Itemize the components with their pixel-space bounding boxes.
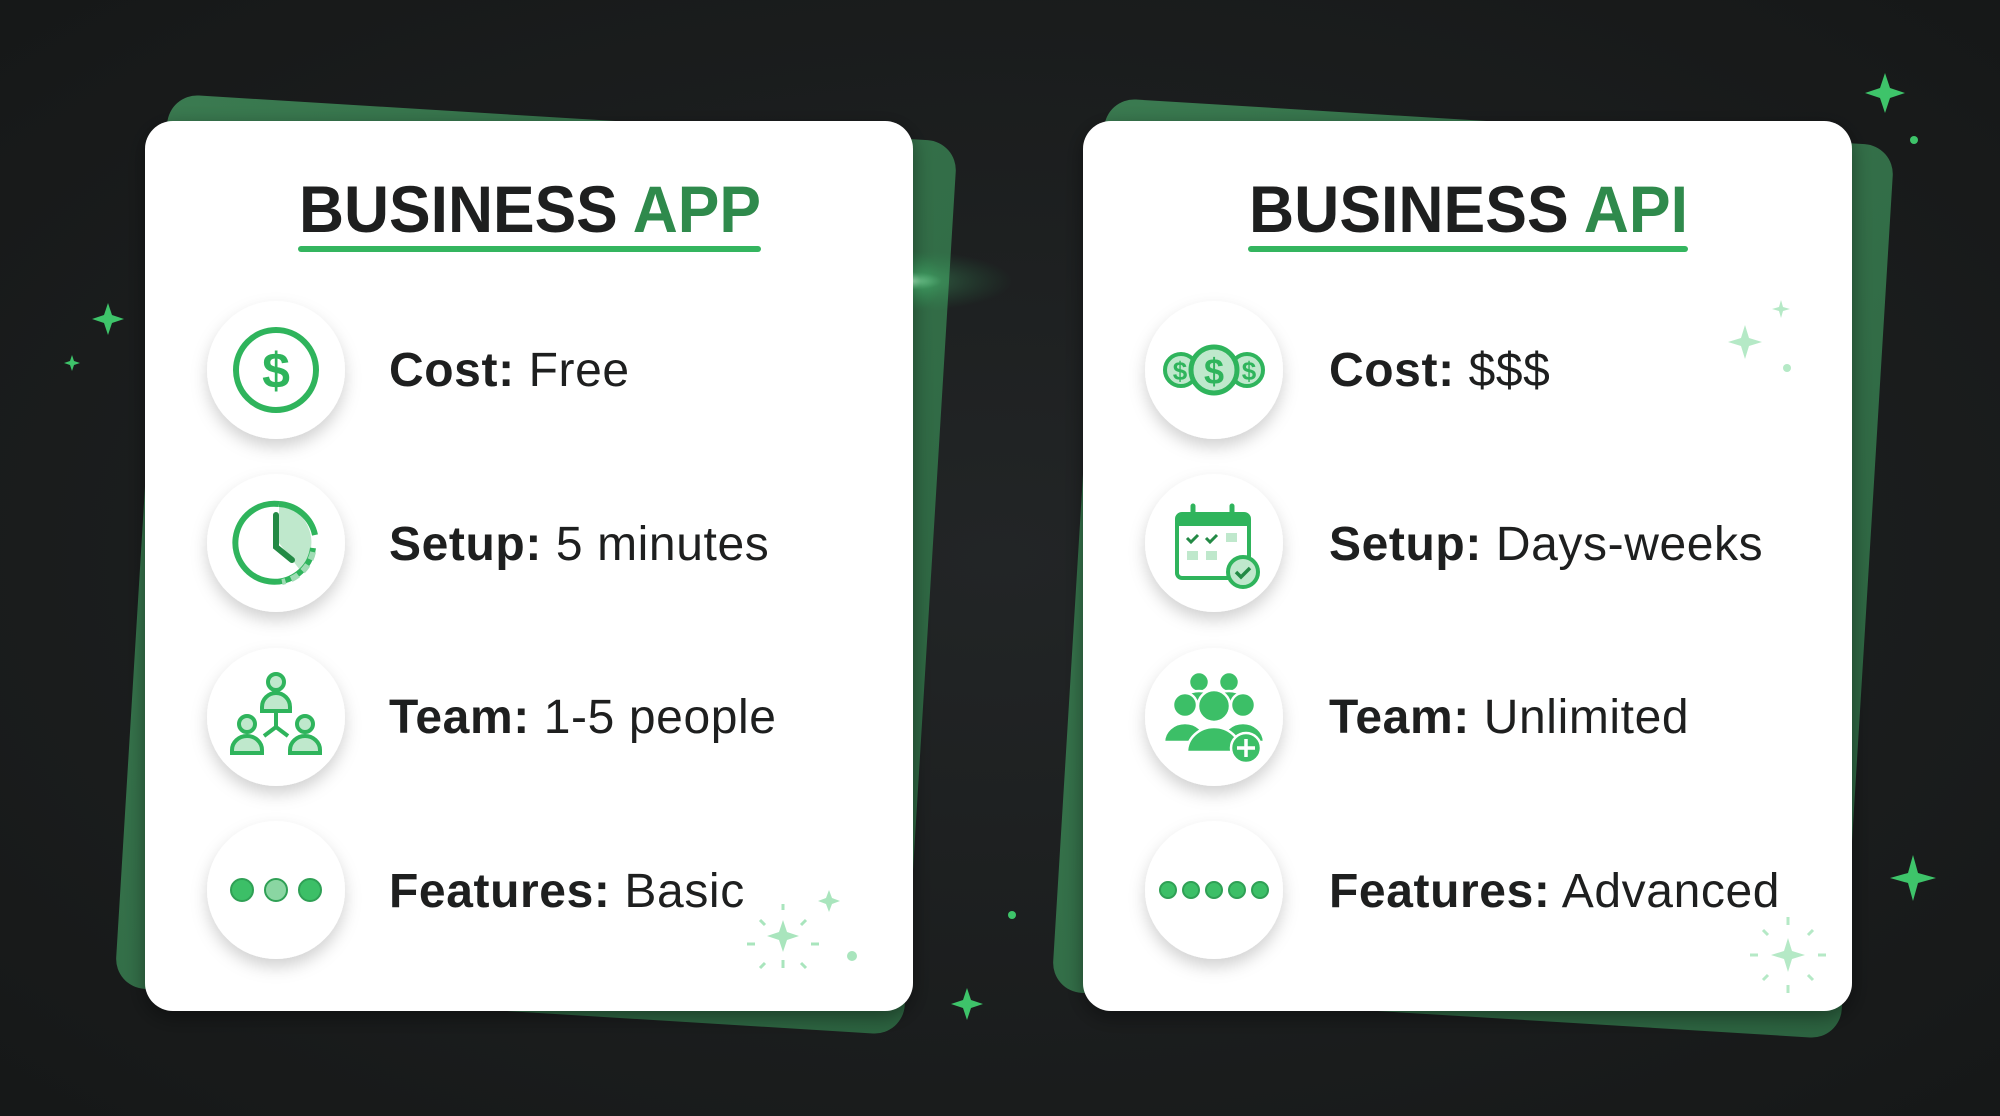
icon: coins xyxy=(1165,347,1263,393)
icon: calendar check xyxy=(1177,506,1258,587)
card: business api xyxy=(1083,121,1852,1011)
row: features basic xyxy=(207,821,745,959)
row: team unlimited xyxy=(1145,648,1689,786)
row: setup days-weeks xyxy=(1145,474,1763,612)
icon: coins: $ xyxy=(1204,351,1224,392)
row: features basic: Features: Basic xyxy=(389,865,745,918)
row: features advanced: Features: Advanced xyxy=(1329,865,1780,918)
icon: team hierarchy xyxy=(232,674,320,753)
sparkles in card xyxy=(747,890,857,968)
icon: five dots xyxy=(1160,882,1268,898)
icon: clock xyxy=(235,504,315,582)
row: cost free: Cost: Free xyxy=(389,344,630,397)
icon: three dots xyxy=(231,879,321,901)
glow sparkle near left card xyxy=(812,251,1012,311)
background sparkles xyxy=(64,73,1936,1020)
row: team unlimited: Team: Unlimited xyxy=(1329,691,1689,744)
icon: coins: $ xyxy=(1242,356,1257,386)
back card right xyxy=(1051,98,1895,1039)
row: cost $$$ xyxy=(1145,301,1550,439)
row: cost $$$: Cost: $$$ xyxy=(1329,344,1550,397)
row: team 1-5 people: Team: 1-5 people xyxy=(389,691,777,744)
row: features advanced xyxy=(1145,821,1780,959)
icon: group plus xyxy=(1164,672,1264,763)
icon: coins: $ xyxy=(1173,356,1188,386)
icon: dollar coin xyxy=(236,330,316,410)
title: business app: BUSINESS APP xyxy=(299,172,761,246)
row: setup 5 minutes: Setup: 5 minutes xyxy=(389,518,769,571)
row: setup days-weeks: Setup: Days-weeks xyxy=(1329,518,1763,571)
card: business app xyxy=(145,121,913,1011)
row: team 1-5 people xyxy=(207,648,777,786)
row: setup 5 minutes xyxy=(207,474,769,612)
back card left xyxy=(114,94,958,1035)
row: cost free xyxy=(207,301,630,439)
sparkles in api card xyxy=(1728,300,1826,993)
icon: dollar coin: $ xyxy=(262,343,290,399)
title: business api: BUSINESS API xyxy=(1249,172,1688,246)
